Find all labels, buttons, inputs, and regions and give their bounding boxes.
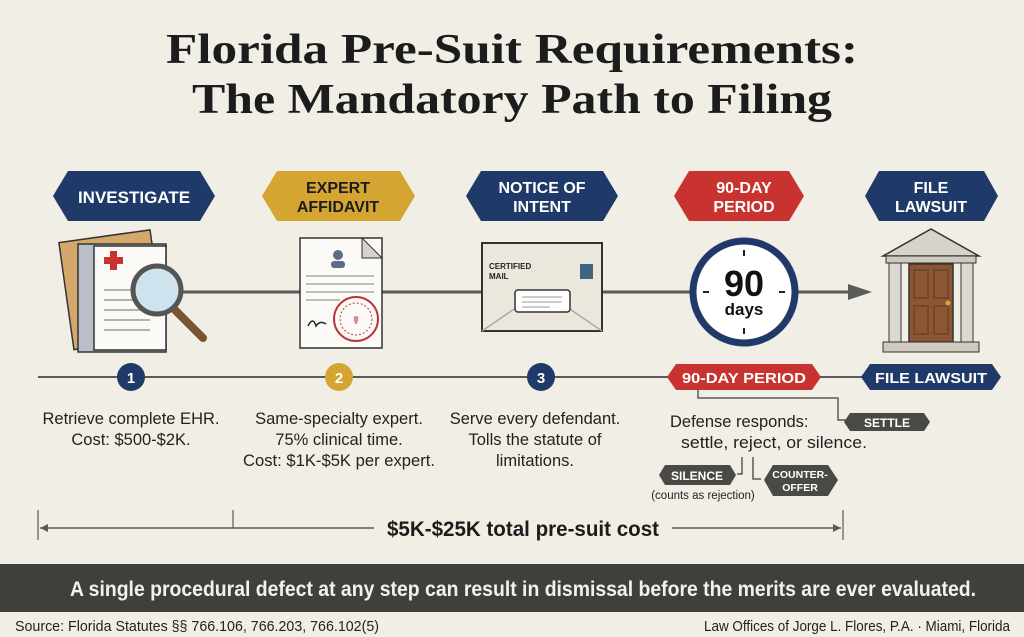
footer: source: Source: Florida Statutes §§ 766.106, 766.203, 766.102(5) bbox=[15, 618, 379, 635]
step marker 3 bbox=[527, 363, 555, 391]
text: step 4: Defense responds: bbox=[670, 413, 809, 431]
text: step 4: settle, reject, or silence. bbox=[681, 434, 867, 452]
title bbox=[166, 27, 858, 123]
text: step 1 bbox=[43, 410, 219, 449]
icon: 90 days clock: 90 bbox=[724, 263, 764, 304]
tag: counter-offer bbox=[764, 465, 838, 496]
tag: silence: (counts as rejection) bbox=[651, 490, 755, 502]
tag: 90-day period bbox=[667, 364, 821, 390]
step label: file lawsuit: LAWSUIT bbox=[895, 199, 967, 216]
step label: notice of intent bbox=[466, 171, 618, 221]
step label: file lawsuit bbox=[865, 171, 998, 221]
tag: settle bbox=[844, 413, 930, 431]
icon: courthouse bbox=[883, 229, 979, 352]
icon: certified mail envelope: MAIL bbox=[489, 272, 509, 281]
tag: settle: SETTLE bbox=[864, 416, 910, 430]
warning banner: A single procedural defect at any step can result in dismissal before the merits are ever evaluated. bbox=[70, 578, 976, 601]
tag: counter-offer: OFFER bbox=[782, 482, 818, 494]
step marker 1 bbox=[117, 363, 145, 391]
text: step 2: Cost: $1K-$5K per expert. bbox=[243, 452, 435, 470]
icon: 90 days clock: days bbox=[725, 300, 763, 319]
connectors to silence and counter-offer bbox=[737, 457, 761, 479]
tag: 90-day period: 90-DAY PERIOD bbox=[682, 370, 806, 387]
step label: investigate bbox=[53, 171, 215, 221]
lower timeline bbox=[38, 376, 1000, 378]
text: step 3 bbox=[450, 410, 620, 470]
text: step 1: Cost: $500-$2K. bbox=[71, 431, 191, 449]
step label: expert affidavit: AFFIDAVIT bbox=[297, 199, 379, 216]
icon: certified mail envelope: CERTIFIED bbox=[489, 262, 531, 271]
icon: medical records with magnifier bbox=[59, 230, 203, 352]
title: Florida Pre-Suit Requirements: bbox=[166, 27, 858, 73]
tag: file lawsuit bbox=[861, 364, 1001, 390]
step marker 3: 3 bbox=[537, 370, 545, 387]
cost bracket bbox=[38, 510, 843, 541]
title: The Mandatory Path to Filing bbox=[192, 77, 832, 123]
text: step 1: Retrieve complete EHR. bbox=[43, 410, 219, 428]
tag: file lawsuit: FILE LAWSUIT bbox=[875, 370, 987, 387]
step marker 1: 1 bbox=[127, 370, 135, 387]
step label: notice of intent: NOTICE OF bbox=[498, 180, 586, 197]
step label: 90-day period: PERIOD bbox=[713, 199, 775, 216]
text: step 4 bbox=[670, 413, 867, 452]
icon: expert affidavit document: ☤ bbox=[352, 315, 360, 327]
step label: notice of intent: INTENT bbox=[513, 199, 571, 216]
text: step 3: limitations. bbox=[496, 452, 574, 470]
icon: expert affidavit document bbox=[300, 238, 382, 348]
text: step 2: 75% clinical time. bbox=[275, 431, 403, 449]
tag: silence: SILENCE bbox=[671, 469, 723, 483]
step marker 2: 2 bbox=[335, 370, 343, 387]
text: step 3: Serve every defendant. bbox=[450, 410, 620, 428]
text: step 2: Same-specialty expert. bbox=[255, 410, 423, 428]
connector to settle bbox=[698, 390, 846, 420]
tag: silence bbox=[651, 465, 755, 502]
step marker 2 bbox=[325, 363, 353, 391]
step label: 90-day period bbox=[674, 171, 804, 221]
tag: counter-offer: COUNTER- bbox=[772, 469, 828, 481]
timeline line with arrow bbox=[180, 284, 872, 300]
cost bracket: $5K-$25K total pre-suit cost bbox=[387, 518, 659, 541]
step label: expert affidavit bbox=[262, 171, 415, 221]
step label: file lawsuit: FILE bbox=[914, 180, 949, 197]
text: step 3: Tolls the statute of bbox=[468, 431, 602, 449]
warning banner bbox=[0, 564, 1024, 612]
step label: investigate: INVESTIGATE bbox=[78, 188, 190, 207]
icon: certified mail envelope bbox=[482, 243, 602, 331]
icon: 90 days clock bbox=[693, 241, 795, 343]
text: step 2 bbox=[243, 410, 435, 470]
step label: 90-day period: 90-DAY bbox=[716, 180, 772, 197]
step label: expert affidavit: EXPERT bbox=[306, 180, 370, 197]
